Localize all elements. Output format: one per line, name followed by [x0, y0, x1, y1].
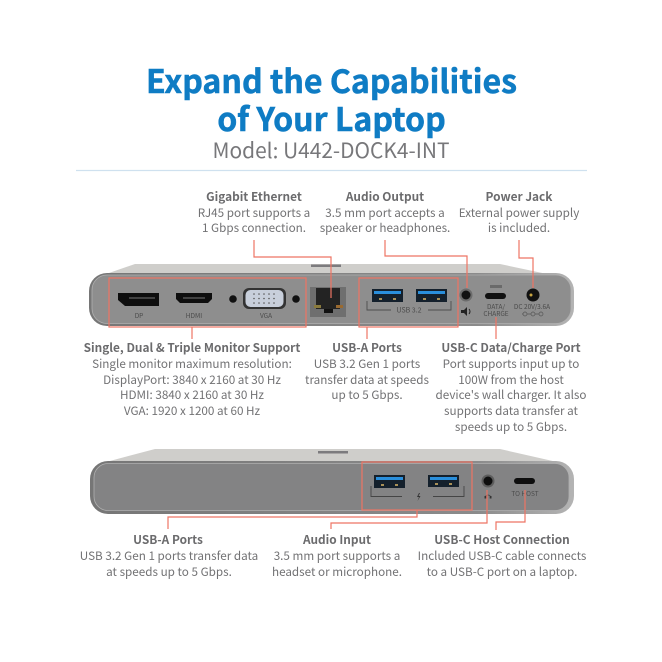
port: VGA [229, 288, 300, 309]
port: power jack: DC 20V/3.6A [514, 301, 550, 311]
text: USB-A Ports (front): USB-A Ports [133, 531, 203, 548]
port: audio input [482, 474, 494, 498]
callout boxes and leader lines [109, 240, 533, 530]
text: USB-A Ports (back): USB 3.2 Gen 1 ports [314, 355, 421, 372]
text: Gigabit Ethernet [198, 188, 310, 236]
text: Monitor Support: VGA: 1920 x 1200 at 60 Hz [124, 402, 261, 419]
port: Ethernet [310, 287, 346, 317]
text: Monitor Support: HDMI: 3840 x 2160 at 30 Hz [120, 386, 264, 403]
port: HDMI [176, 293, 212, 303]
port labels: VGA [260, 310, 272, 320]
port: USB-C data/charge: CHARGE [483, 308, 509, 318]
text: Audio Input: Audio Input [302, 531, 371, 548]
brand mark [318, 451, 348, 454]
text: USB-C Data/Charge Port [436, 339, 586, 435]
port: power jack [514, 288, 550, 316]
text: Gigabit Ethernet: Gigabit Ethernet [206, 188, 302, 205]
port: USB-C host: TO HOST [511, 488, 539, 498]
port: USB-C host [511, 478, 539, 498]
text: Monitor Support [84, 339, 300, 419]
port: USB-C data/charge: DATA/ [487, 301, 505, 311]
text: Audio Output [320, 188, 450, 236]
text: Audio Output: speaker or headphones. [320, 219, 450, 236]
text: Audio Output: 3.5 mm port accepts a [325, 204, 445, 221]
port: USB-A pair: USB 3.2 [396, 306, 422, 316]
text: USB-C Data/Charge Port: speeds up to 5 Gbps. [455, 418, 567, 435]
text: Power Jack: External power supply [459, 204, 579, 221]
text: USB-A Ports (back): up to 5 Gbps. [331, 386, 403, 403]
text: USB-A Ports (front): USB 3.2 Gen 1 ports transfer data [80, 547, 258, 564]
text: USB-A Ports (back) [305, 339, 429, 403]
text: Monitor Support: Single monitor maximum resolution: [92, 355, 292, 372]
text: USB-A Ports (front): at speeds up to 5 Gbps. [106, 563, 232, 580]
port: DisplayPort [118, 293, 159, 306]
text: USB-C Host Connection: to a USB-C port on a laptop. [427, 563, 577, 580]
text: Monitor Support: Single, Dual & Triple Monitor Support [84, 339, 300, 356]
text: Power Jack [459, 188, 579, 236]
text: USB-C Data/Charge Port: device's wall charger. It also [436, 386, 586, 403]
text: USB-A Ports (back): transfer data at speeds [305, 371, 429, 388]
text: Audio Output: Audio Output [345, 188, 424, 205]
text: Power Jack: is included. [488, 219, 550, 236]
text: USB-A Ports (front) [80, 531, 258, 580]
text: USB-C Host Connection: Included USB-C cable connects [418, 547, 587, 564]
port: USB-A pair [367, 289, 451, 316]
port: USB-A pair [371, 475, 464, 501]
title [146, 57, 517, 141]
text: USB-C Host Connection: USB-C Host Connection [434, 531, 570, 548]
text: Audio Input [272, 531, 402, 580]
port: USB-C data/charge [483, 285, 509, 318]
text: Audio Input: 3.5 mm port supports a [274, 547, 400, 564]
text: Gigabit Ethernet: RJ45 port supports a [198, 204, 310, 221]
text: USB-C Data/Charge Port: supports data transfer at [444, 402, 579, 419]
text: USB-C Data/Charge Port: USB-C Data/Charge Port [441, 339, 581, 356]
dock: back view [89, 264, 574, 326]
brand mark [311, 264, 341, 267]
port labels: DP [135, 310, 143, 320]
text: USB-C Data/Charge Port: Port supports input up to [443, 355, 579, 372]
text: Monitor Support: DisplayPort: 3840 x 2160 at 30 Hz [103, 371, 281, 388]
text: Gigabit Ethernet: 1 Gbps connection. [202, 219, 306, 236]
port labels: HDMI [186, 310, 202, 320]
port: audio output [460, 288, 472, 316]
text: USB-C Data/Charge Port: 100W from the host [458, 371, 564, 388]
model subtitle: Model: U442-DOCK4-INT [213, 135, 449, 165]
text: Audio Input: headset or microphone. [272, 563, 402, 580]
title: Expand the Capabilities [146, 57, 517, 103]
port labels [135, 310, 272, 320]
title: of Your Laptop [217, 95, 446, 141]
text: USB-A Ports (back): USB-A Ports [332, 339, 402, 356]
dock: front view [90, 449, 574, 514]
text: USB-C Host Connection [418, 531, 587, 580]
text: Power Jack: Power Jack [486, 188, 553, 205]
